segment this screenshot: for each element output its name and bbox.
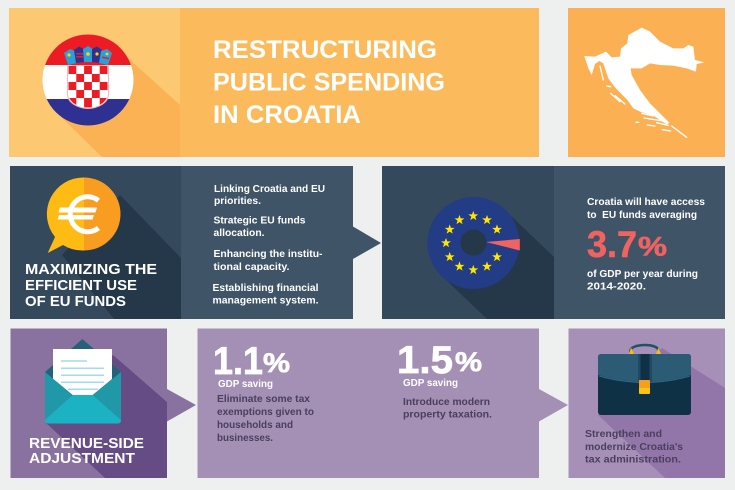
big number: 3.7%: 3.7 <box>587 224 637 265</box>
text block: priorities list: Strategic EU funds <box>214 216 306 226</box>
icon: Croatian flag <box>42 34 134 126</box>
big number: 3.7%: % <box>638 232 667 262</box>
heading: revenue-side adjustment: ADJUSTMENT <box>29 450 135 467</box>
arrow: to tax administration <box>539 389 568 422</box>
text block: tax administration: tax administration. <box>585 454 681 466</box>
text block: priorities list <box>212 184 325 306</box>
text block: tax exemptions: Eliminate some tax <box>217 394 310 405</box>
text block: priorities list: management system. <box>212 296 319 306</box>
panel: tax administration <box>568 328 725 478</box>
icon: euro speech bubble <box>47 177 120 253</box>
text block: priorities list: Linking Croatia and EU <box>214 184 325 195</box>
title <box>213 36 445 129</box>
text block: EU funds averaging 3.7%: of GDP per year during <box>587 269 698 280</box>
stat: 1.5% GDP saving: GDP saving <box>403 377 458 389</box>
arrow: to GDP savings <box>167 389 196 422</box>
stat: 1.5% GDP saving <box>397 339 482 389</box>
panel: title banner <box>9 8 539 157</box>
heading: maximizing the efficient use of EU funds <box>25 261 157 310</box>
heading: maximizing the efficient use of EU funds: MAXIMIZING THE <box>25 261 157 278</box>
heading: revenue-side adjustment: REVENUE-SIDE <box>29 435 144 452</box>
title: IN CROATIA <box>213 101 361 129</box>
icon: Croatia map <box>584 28 704 137</box>
stat: 1.5% GDP saving: 1.5 <box>397 339 453 382</box>
text block: tax administration <box>585 429 683 466</box>
text block: priorities list: priorities. <box>214 196 261 207</box>
chart: EU flag pie with 3.7% slice <box>428 197 520 289</box>
text block: EU funds averaging 3.7% <box>587 197 705 292</box>
text block: tax exemptions <box>217 394 314 444</box>
text block: priorities list: Establishing financial <box>212 283 319 294</box>
stat: 1.1% GDP saving: GDP saving <box>218 378 273 390</box>
icon: briefcase <box>598 345 691 415</box>
panel: EU funds access <box>382 166 725 319</box>
text block: property taxation: Introduce modern <box>403 397 490 408</box>
stat: 1.5% GDP saving: % <box>455 347 482 377</box>
text block: EU funds averaging 3.7%: to EU funds averaging <box>587 210 697 221</box>
big number: 3.7% <box>587 224 667 265</box>
title: RESTRUCTURING <box>213 36 437 64</box>
panel: revenue-side adjustment <box>10 328 196 478</box>
panel: GDP savings <box>198 328 568 478</box>
text block: tax administration: Strengthen and <box>585 429 662 440</box>
text block: priorities list: Enhancing the institu- <box>214 249 322 260</box>
text block: priorities list: tional capacity. <box>214 262 290 273</box>
arrow: to EU funds panel <box>353 226 381 259</box>
text block: tax exemptions: exemptions given to <box>217 407 314 418</box>
panel: map of Croatia <box>568 8 725 157</box>
heading: revenue-side adjustment <box>29 435 144 467</box>
text block: property taxation: property taxation. <box>403 410 492 420</box>
heading: maximizing the efficient use of EU funds: EFFICIENT USE <box>25 277 137 294</box>
text block: property taxation <box>403 397 492 420</box>
heading: maximizing the efficient use of EU funds: OF EU FUNDS <box>25 293 126 310</box>
stat: 1.1% GDP saving <box>213 340 290 390</box>
text block: priorities list: allocation. <box>214 228 265 239</box>
panel: maximizing EU funds <box>10 166 381 319</box>
text block: tax administration: modernize Croatia's <box>585 442 683 453</box>
icon: envelope with letter <box>45 339 121 424</box>
stat: 1.1% GDP saving: 1.1 <box>213 340 263 383</box>
stat: 1.1% GDP saving: % <box>263 348 290 378</box>
text block: tax exemptions: households and <box>217 420 293 431</box>
text block: EU funds averaging 3.7%: 2014-2020. <box>587 282 646 292</box>
text block: EU funds averaging 3.7%: Croatia will have access <box>587 197 705 208</box>
text block: tax exemptions: businesses. <box>217 433 273 444</box>
title: PUBLIC SPENDING <box>213 68 445 96</box>
